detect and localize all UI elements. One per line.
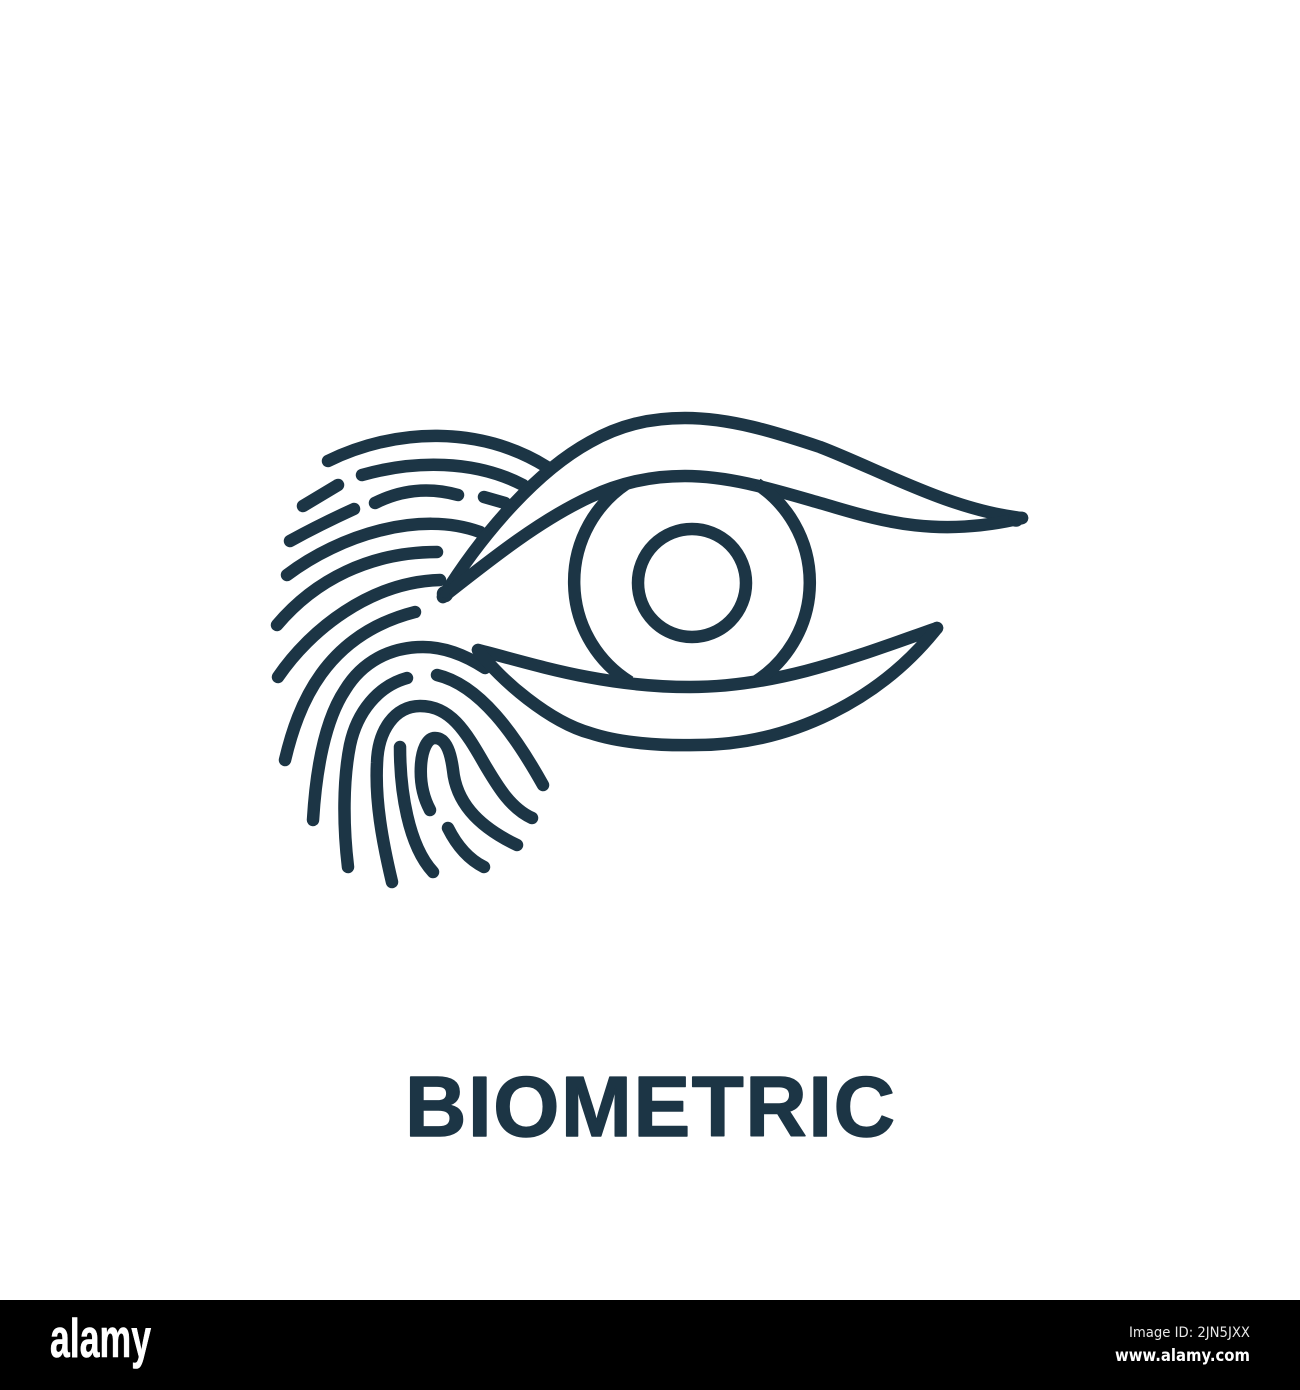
icon: upper eyelid: [443, 418, 1022, 597]
title: BIOMETRIC: [405, 1060, 895, 1155]
footer bar: [0, 1300, 1300, 1390]
footer image id: Image ID: 2JN5JXX: [1129, 1325, 1250, 1341]
footer url: www.alamy.com: [1115, 1346, 1250, 1365]
icon: lower eyelid: [478, 628, 937, 745]
icon: biometric eye and fingerprint: [277, 418, 1022, 882]
footer logo: alamy: [50, 1307, 151, 1369]
icon: iris: [574, 484, 810, 682]
icon: fingerprint ridges: [277, 436, 547, 882]
icon: pupil: [638, 529, 746, 637]
